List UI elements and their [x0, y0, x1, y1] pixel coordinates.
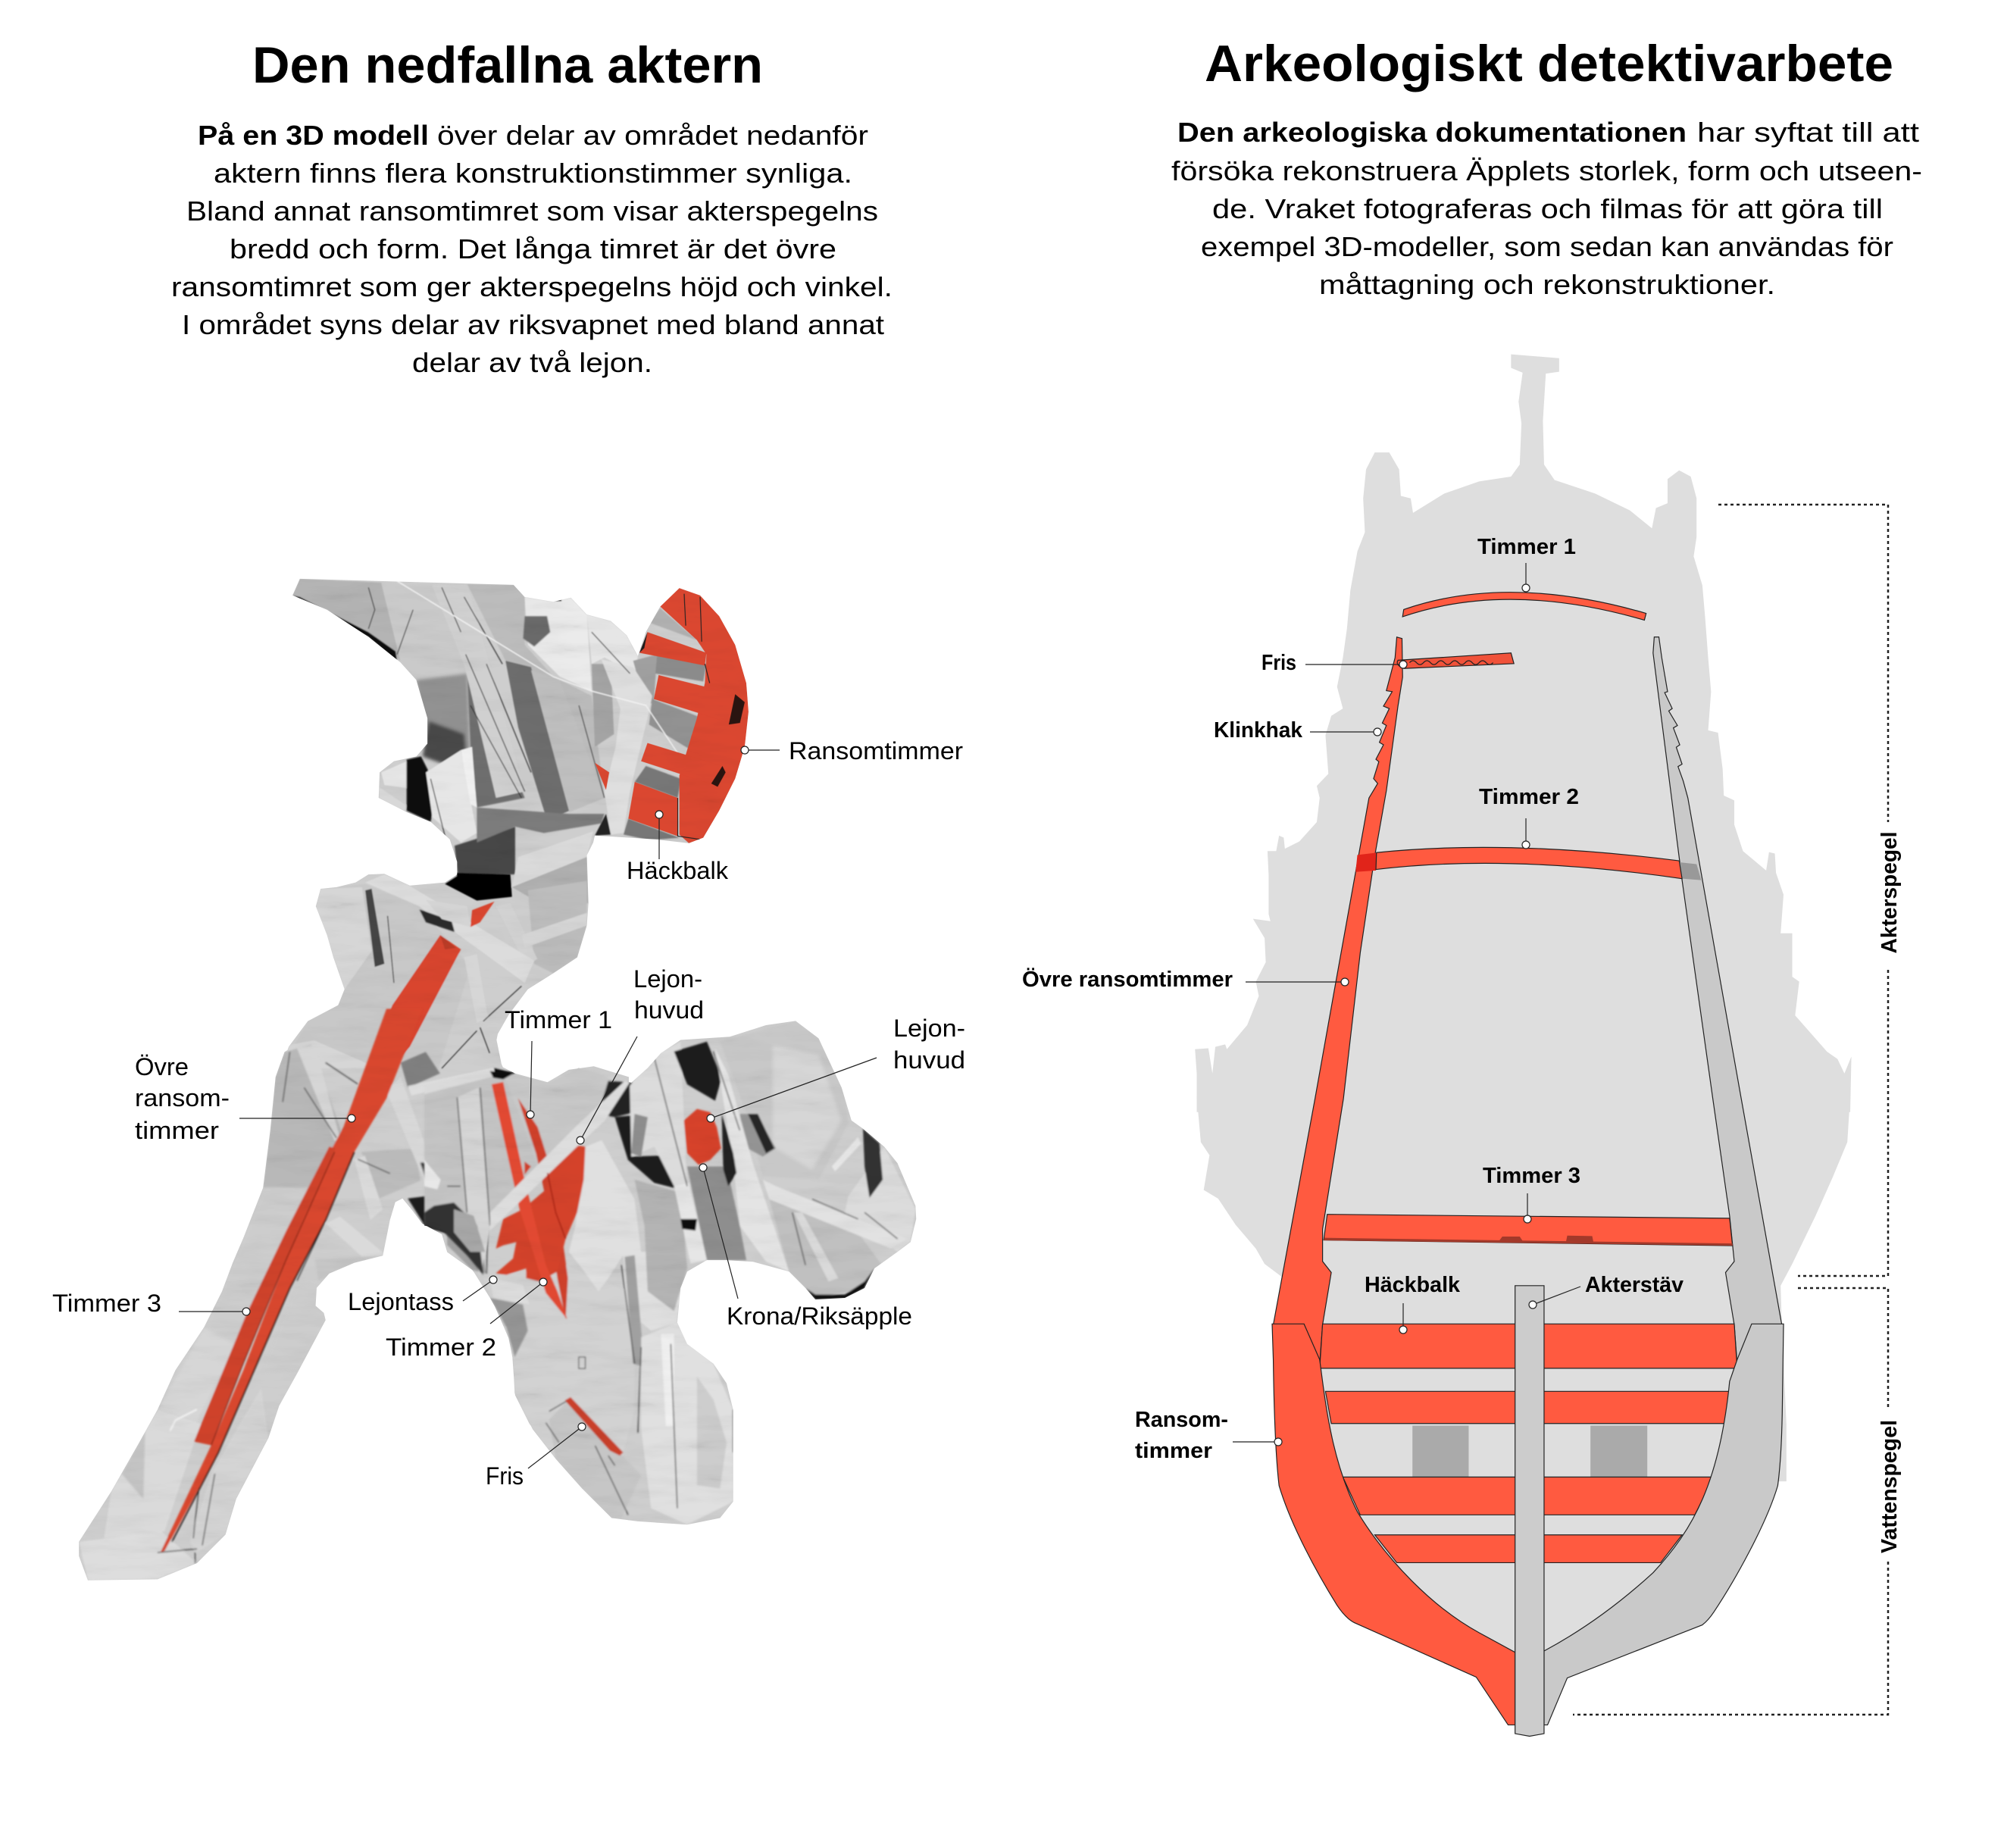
title: Den nedfallna aktern: Den nedfallna aktern — [252, 36, 763, 94]
label: Lejonhuvud centre: Lejon- — [633, 965, 702, 993]
leg of photo — [79, 1009, 515, 1581]
text block: right intro: de. Vraket fotograferas och filmas för att göra till — [1212, 193, 1883, 224]
text block: left intro: ransomtimret som ger akterspegelns höjd och vinkel. — [171, 271, 893, 302]
label: Övre ransomtimmer left: Övre — [135, 1053, 189, 1080]
title: Arkeologiskt detektivarbete: Arkeologiskt detektivarbete — [1205, 35, 1893, 92]
mottled wood noise — [131, 595, 896, 1550]
label: Häckbalk diagram: Häckbalk — [1365, 1273, 1461, 1297]
text block: left intro: På en 3D modell — [198, 120, 429, 151]
label: Timmer 1 diagram: Timmer 1 — [1477, 535, 1576, 559]
label: Timmer 1 left: Timmer 1 — [505, 1006, 612, 1033]
bracket: Akterspegel — [1718, 505, 1902, 1276]
label: Övre ransomtimmer left: ransom- — [135, 1084, 230, 1112]
upper red ransomtimmer and häckbalk — [595, 588, 749, 843]
label: Fris left — [486, 1423, 586, 1490]
label: Lejontass: Lejontass — [348, 1288, 454, 1315]
label: Timmer 2 left — [386, 1278, 547, 1361]
text block: left intro: över delar av området nedanför — [437, 120, 868, 151]
central and right photo — [424, 1021, 915, 1524]
label: Övre ransomtimmer left: timmer — [135, 1117, 219, 1144]
photo: 3D model of the fallen stern — [79, 579, 917, 1581]
diagram: stern reconstruction — [1195, 355, 1852, 1736]
label: Fris diagram — [1261, 651, 1407, 675]
label: Timmer 2 diagram: Timmer 2 — [1479, 785, 1579, 809]
label: Fris diagram: Fris — [1261, 651, 1296, 675]
label: Timmer 1 diagram — [1477, 535, 1576, 592]
text block: right intro — [1171, 117, 1922, 300]
label: Lejonhuvud centre: huvud — [634, 996, 704, 1024]
timmer 3 beam — [1324, 1215, 1733, 1246]
text block: left intro: I området syns delar av riksvapnet med bland annat — [182, 309, 884, 340]
label: Timmer 3 left: Timmer 3 — [52, 1290, 161, 1317]
red timbers, lion, fris and crown — [518, 1098, 568, 1319]
label: Timmer 3 diagram — [1483, 1164, 1580, 1223]
timmer 2 beam — [1376, 847, 1682, 879]
label: Krona/Riksäpple: Krona/Riksäpple — [727, 1302, 912, 1330]
bracket: Vattenspegel: Vattenspegel — [1877, 1420, 1902, 1553]
text block: left intro: delar av två lejon. — [412, 347, 652, 378]
label: Timmer 2 left: Timmer 2 — [386, 1334, 496, 1361]
label: Ransomtimmer diagram — [1135, 1408, 1282, 1463]
label: Klinkhak — [1214, 718, 1381, 743]
fris — [1397, 653, 1514, 668]
text block: right intro: Den arkeologiska dokumentationen — [1177, 117, 1687, 148]
upper photo planks — [279, 579, 706, 1068]
label: Lejontass — [348, 1276, 497, 1315]
label: Akterstäv — [1529, 1273, 1684, 1309]
label: Lejonhuvud centre — [577, 965, 704, 1144]
label: Häckbalk — [627, 811, 729, 884]
label: Akterstäv: Akterstäv — [1585, 1273, 1684, 1297]
label: Fris left: Fris — [486, 1462, 524, 1490]
label: Krona/Riksäpple — [699, 1164, 912, 1330]
label: Lejonhuvud right: Lejon- — [893, 1015, 965, 1042]
text block: right intro: försöka rekonstruera Äpplets storlek, form och utseen- — [1171, 155, 1922, 186]
label: Timmer 1 left — [505, 1006, 612, 1118]
label: Ransomtimmer: Ransomtimmer — [789, 737, 963, 765]
lower part of upper photo — [281, 884, 471, 1068]
label: Timmer 3 left — [52, 1290, 250, 1317]
bracket: Vattenspegel — [1573, 1288, 1902, 1715]
label: Lejonhuvud right — [707, 1015, 965, 1122]
lower ransomtimmer left — [1272, 1324, 1515, 1725]
lower structure of ransom and beams — [1272, 1215, 1784, 1736]
häckbalk beams — [1320, 1324, 1737, 1368]
label: Övre ransomtimmer left — [135, 1053, 355, 1144]
label: Ransomtimmer diagram: Ransom- — [1135, 1408, 1228, 1432]
akterstäv — [1515, 1286, 1544, 1736]
label: Timmer 2 diagram — [1479, 785, 1579, 849]
text block: left intro: bredd och form. Det långa timret är det övre — [230, 233, 836, 264]
text block: right intro: exempel 3D-modeller, som sedan kan användas för — [1201, 231, 1893, 262]
label: Timmer 3 diagram: Timmer 3 — [1483, 1164, 1580, 1188]
bracket: Akterspegel: Akterspegel — [1877, 832, 1902, 953]
text block: left intro: Bland annat ransomtimret som visar akterspegelns — [186, 195, 878, 227]
text block: left intro — [171, 120, 893, 378]
label: Häckbalk: Häckbalk — [627, 857, 729, 884]
lower ransomtimmer right — [1544, 1324, 1784, 1725]
text block: right intro: har syftat till att — [1697, 117, 1919, 148]
label: Häckbalk diagram — [1365, 1273, 1461, 1334]
timmer 1 beam — [1402, 593, 1646, 620]
label: Ransomtimmer diagram: timmer — [1135, 1439, 1212, 1463]
text block: right intro: måttagning och rekonstruktioner. — [1319, 269, 1775, 300]
label: Övre ransomtimmer diagram: Övre ransomtimmer — [1022, 967, 1233, 992]
label: Lejonhuvud right: huvud — [893, 1046, 965, 1074]
silhouette of the stern — [1195, 355, 1852, 1664]
label: Klinkhak: Klinkhak — [1214, 718, 1303, 743]
label: Övre ransomtimmer diagram — [1022, 967, 1349, 992]
text block: left intro: aktern finns flera konstruktionstimmer synliga. — [214, 158, 852, 189]
timber joins and upper beams — [1355, 593, 1701, 880]
ransomtimmer right, upper strip — [1653, 637, 1782, 1364]
ransomtimmer left, upper strip — [1274, 637, 1402, 1364]
